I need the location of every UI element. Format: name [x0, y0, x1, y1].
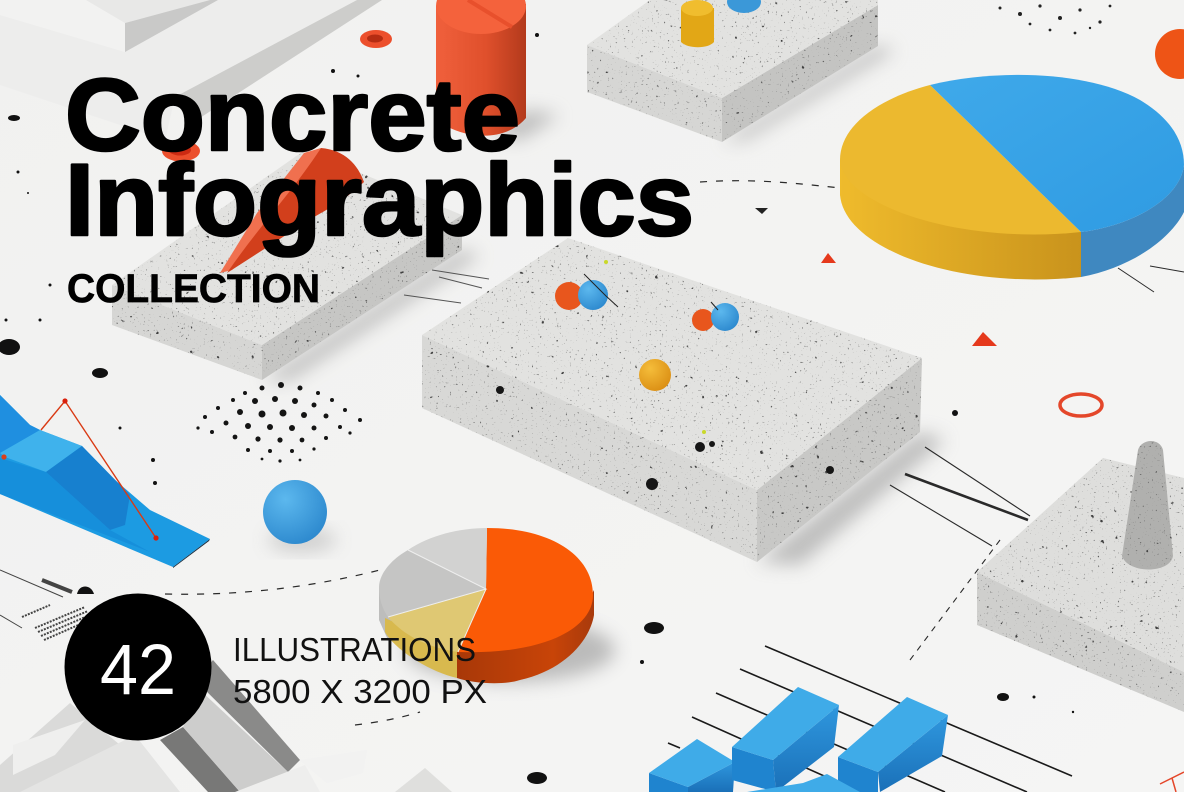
- blue bar A: [732, 687, 839, 792]
- icon: red ring top: [360, 30, 392, 48]
- shadows: [262, 46, 945, 565]
- red line graph: [1, 398, 159, 541]
- icon: red triangles: [755, 208, 997, 346]
- thin diagram lines: [165, 181, 1184, 725]
- title: Infographics: [65, 143, 694, 257]
- panel: top-left white slabs: [0, 0, 382, 140]
- text block: illustrations info: [233, 631, 487, 710]
- blue bar C: [649, 739, 735, 792]
- text block: illustrations info: 5800 X 3200 PX: [233, 673, 487, 710]
- panel: top concrete block: [587, 0, 878, 142]
- icon: black spots: [527, 410, 1074, 784]
- panel: bottom right concrete block: [977, 441, 1184, 712]
- icon: yellow cylinder: [681, 0, 714, 47]
- icon: yellow ball: [639, 359, 671, 391]
- icon: red cylinder: [436, 0, 526, 136]
- panel: white stairs bottom left: [0, 660, 452, 792]
- icon: orange and blue balls: [555, 274, 618, 310]
- icon: small orange and blue balls: [692, 302, 739, 331]
- chart: bottom lines and blue bars: [649, 646, 1072, 792]
- panel: left document page: [0, 570, 94, 640]
- panel: central concrete block: [422, 238, 922, 562]
- icon: red ring left: [162, 140, 200, 162]
- icon: dotted pattern top right: [998, 4, 1111, 34]
- icon: small red mark: [1160, 772, 1184, 792]
- text block: illustrations info: ILLUSTRATIONS: [233, 631, 476, 668]
- icon: blue ball: [727, 0, 761, 13]
- icon: dot cluster: [196, 382, 362, 463]
- subtitle: COLLECTION: [67, 267, 320, 311]
- title: Concrete: [65, 58, 520, 172]
- badge: 42: 42: [100, 631, 176, 710]
- chart: orange and grey pie: [379, 528, 615, 683]
- title: [65, 58, 694, 257]
- blue bar D: [747, 774, 860, 792]
- icon: blue sphere: [263, 480, 336, 552]
- panel: left concrete block with red shapes: [112, 148, 462, 380]
- blue bar B: [838, 697, 948, 792]
- icon: orange ball top right: [1155, 29, 1184, 79]
- icon: left black dots: [0, 33, 539, 485]
- chart: blue mountain with red line: [0, 395, 210, 568]
- badge: 42: [64, 594, 212, 740]
- icon: red curved shapes: [220, 148, 364, 273]
- chart: yellow and blue pie: [840, 75, 1184, 279]
- icon: concrete cone: [1122, 441, 1173, 570]
- icon: red ring right: [1060, 394, 1102, 416]
